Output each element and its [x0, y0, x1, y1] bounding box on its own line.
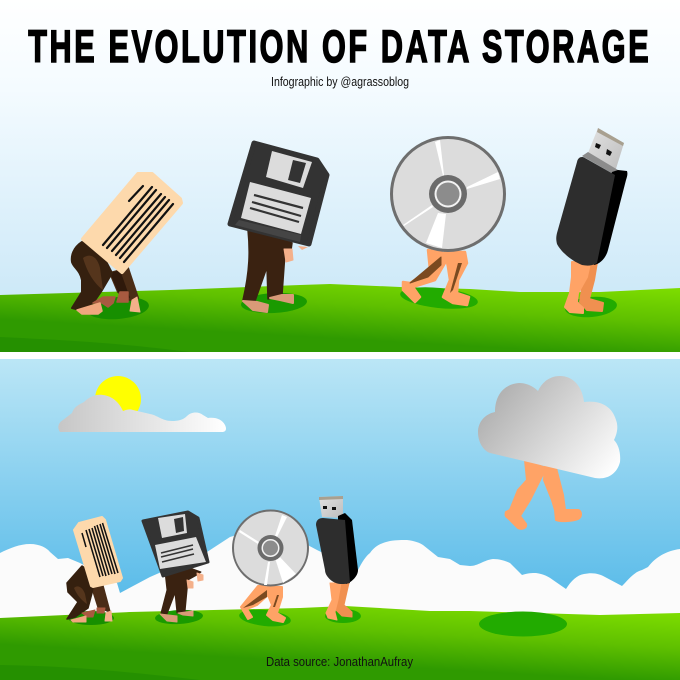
top ground [0, 284, 680, 352]
sun [95, 376, 141, 422]
bottom sky [0, 359, 680, 599]
brown legs [161, 568, 201, 614]
brown legs [72, 242, 138, 310]
disc reflections [403, 140, 500, 248]
label [241, 182, 311, 234]
disc [392, 138, 504, 250]
brown legs [67, 566, 110, 619]
panel: bottom scene [0, 359, 680, 680]
shadow [68, 611, 114, 625]
figure: USB stick walking [556, 128, 627, 319]
small figure: CD [233, 510, 308, 629]
plug [319, 496, 343, 518]
small figure: USB stick [316, 496, 361, 623]
figure: CD walking [392, 138, 504, 312]
feet [71, 608, 112, 622]
floppy body [230, 143, 327, 244]
collar [582, 152, 618, 175]
shadow [238, 607, 292, 629]
bottom ground [0, 606, 680, 680]
punch card lines [103, 186, 173, 262]
plug holes [595, 143, 612, 156]
shadow [241, 291, 307, 315]
small figure: floppy disk [143, 512, 208, 625]
plug lip [319, 496, 343, 500]
big cloud [478, 376, 620, 478]
plug lip [597, 128, 624, 146]
white cloud bank [0, 525, 680, 620]
shadow [399, 284, 479, 312]
plug [588, 128, 624, 172]
card lines [82, 523, 118, 577]
panel: top scene [0, 0, 680, 352]
big cloud shadow [479, 612, 567, 636]
figure: punch card walking [72, 174, 181, 322]
subtitle: Infographic by @agrassoblog [271, 75, 409, 89]
shutter hole [174, 517, 184, 533]
big cloud legs [506, 460, 581, 529]
title: THE EVOLUTION OF DATA STORAGE [28, 22, 651, 73]
feet [77, 292, 140, 314]
disc [233, 510, 308, 586]
hub [258, 535, 284, 561]
shadow [155, 609, 203, 625]
top sky [0, 0, 680, 296]
plug holes [323, 506, 336, 510]
punch card [83, 174, 181, 272]
card [74, 517, 122, 587]
hands and feet [160, 573, 203, 622]
shutter [158, 514, 187, 538]
small figure: punch card [67, 517, 122, 625]
floppy body [143, 512, 208, 576]
shadow [325, 609, 361, 623]
data source credit: Data source: JonathanAufray [266, 654, 413, 669]
shutter hole [288, 160, 306, 183]
legs [403, 250, 469, 305]
body front [316, 518, 350, 584]
legs [565, 262, 603, 313]
floppy lower band [235, 220, 301, 242]
shadow [564, 295, 618, 319]
legs [241, 586, 285, 622]
body side [585, 170, 627, 265]
small grey cloud [58, 395, 226, 432]
figure: floppy disk walking [230, 143, 327, 315]
divider band [0, 352, 680, 359]
label lines [250, 195, 303, 222]
disc reflections [239, 515, 296, 585]
brown legs [243, 230, 292, 301]
label [155, 537, 206, 569]
hub [429, 175, 467, 213]
label lines [161, 545, 194, 562]
shutter [266, 151, 312, 188]
shadow [86, 294, 150, 322]
hands and feet [243, 246, 308, 312]
body side [338, 513, 358, 584]
body front [556, 157, 615, 266]
legs [326, 583, 352, 620]
